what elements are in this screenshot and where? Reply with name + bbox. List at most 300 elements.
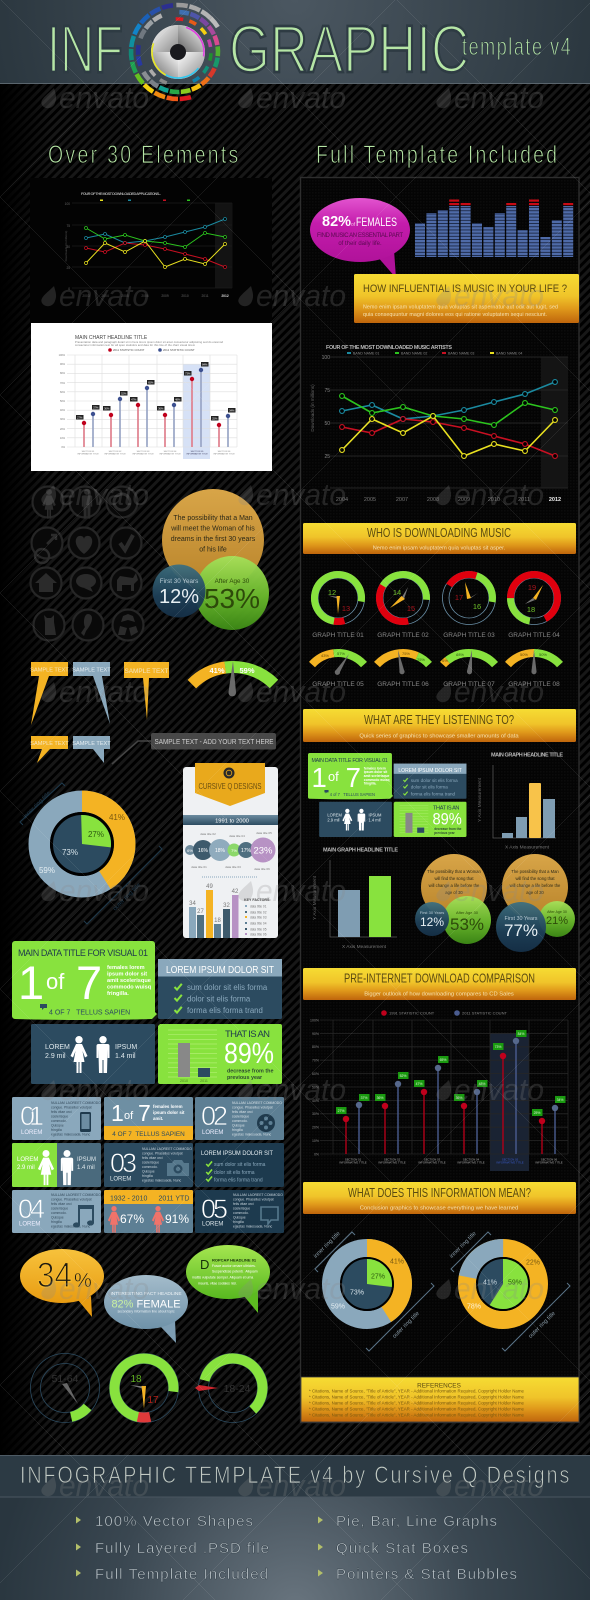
gauge: graph title 06 [354,639,452,737]
mini bar chart: 32 [223,903,230,909]
panel: white lollipop chart: SECTION 03 [137,451,150,453]
gauge: graph title 08: GRAPH TITLE 08 [508,681,560,688]
bubble row: data title 05 [256,831,272,835]
panel: white lollipop chart: 90% [60,363,66,366]
gauge: graph title 03: 17 [455,593,463,602]
tile 05: congue. Phasellus volutpat [233,1198,274,1202]
tile 05: NULLAM LAOREET COMMODO [233,1193,283,1197]
chart: downloads line chart: 2008 [427,497,439,503]
tile 05: felis vitae orci [233,1202,254,1206]
chart: downloads line chart: 100 [322,355,330,361]
gauge: 18 17 ring: 18 [130,1374,142,1385]
panel: small line chart: 2012 [221,294,229,298]
stat: population male female: LOREM [45,1044,70,1051]
key factors legend: data title 06 [250,932,267,936]
panel: white lollipop chart: SECTION 04 [164,451,177,453]
bubble row: data title 02 [200,832,216,836]
watermark: envato logos: envato [454,278,544,313]
tile 01: 01 [20,1101,44,1131]
stat: population male female: 1.4 mil [115,1053,136,1060]
chart: downloads line chart: 75 [324,388,330,394]
tile 1 of 7: of [124,1110,134,1122]
tile 1 of 7: amit. [153,1116,163,1121]
banner: how influential is music: Nemo enim ipsam voluptatem quia voluptas sit aspernatur aut odit aut fugit, sed [363,304,558,310]
gauge: graph title 08: 50% [520,652,528,657]
tile list: forma elis forma trand [214,1178,263,1184]
tile 01: NULLAM LAOREET COMMODO [51,1101,101,1105]
venn: possibility for a man: The possibility that a Man [511,869,559,874]
bubble row: 7% [231,848,237,853]
pointer: grey line callout: SAMPLE TEXT - ADD YOUR TEXT HERE [154,737,274,746]
heading: Over 30 Elements: Over 30 Elements [48,141,238,169]
feature list: left column: Fully Layered .PSD file [95,1540,269,1557]
tile 01 [12,1097,101,1140]
watermark: envato logos: envato [59,873,149,908]
gauge: graph title 07: GRAPH TITLE 07 [443,681,495,688]
tile 1 of 7: ipsum dolor sit [153,1110,185,1115]
pointer: orange narrow: SAMPLE TEXT [125,668,169,675]
legend: 2011 STATISTIC COUNT [113,348,145,352]
panel: small line chart: 2009 [161,294,169,298]
chart: statistic comparison lollipops: 65% [440,1058,446,1062]
gauge: graph title 07 [420,639,518,737]
panel: small line chart: 2005 [121,294,129,298]
tile male female [12,1143,101,1187]
panel: white lollipop chart: 36% [158,406,164,410]
banner: what does this information mean [303,1182,576,1214]
chart: statistic comparison lollipops: 52% [400,1074,406,1078]
stat: 89% decrease: decrease from the [227,1068,273,1074]
donut chart: 41 / 59 [313,1231,434,1351]
feature list: right column: Quick Stat Boxes [336,1540,468,1557]
title: INF GRAPHIC: INF [47,12,123,87]
tile 04: congue. Phasellus volutpat [51,1198,92,1202]
chart: downloads line chart: 2007 [396,497,408,503]
mini dashboard: quick stats: dolor sit elis forma [411,785,448,790]
chart: statistic comparison lollipops: 100% [310,1018,319,1022]
panel: white lollipop chart: 65% [148,380,154,384]
venn: possibility for a man: 21% [546,915,568,927]
stat: 1 of 7: commodo wuisq [107,984,152,990]
venn: possibility for a man [496,854,575,952]
venn: possibility of a man meeting the woman of his dreams: First 30 Years [160,578,198,585]
mini dashboard: quick stats: ipsum dolor sit [364,770,388,774]
donut chart: 41 / 59: 27% [371,1274,385,1280]
icon: colour wheel logo [130,4,219,100]
stat: 1 of 7 [12,941,157,1020]
venn: possibility for a man: will find the song that [515,876,555,881]
venn: possibility for a man: 77% [504,921,538,940]
venn: possibility for a woman: The possibility that a Woman [427,869,482,874]
chart: downloads line chart: FOUR OF THE MOST DOWNLOADED MUSIC ARTISTS [326,345,452,351]
gauge: 51-64 ring: 51-64 [52,1373,79,1385]
tile 02 [195,1097,284,1140]
tile 1 of 7 [104,1097,193,1140]
tile 01: fringilla [51,1128,62,1132]
donut chart: 41% [109,813,125,822]
speech bubble: 82% females: FEMALES [356,215,397,229]
mini dashboard: quick stats: 4 of 7 TELLUS SAPIEN [330,792,375,797]
tile 04: NULLAM LAOREET COMMODO [51,1193,101,1197]
tile 05: Quisque [233,1216,246,1220]
tile dates and percentages: 91% [165,1212,189,1226]
watermark: envato logos: envato [454,873,544,908]
watermark: envato logos: envato [454,1072,544,1107]
tile 01: egestas malesuada. Nunc [51,1132,91,1136]
mini dashboard: quick stats: previous year [434,831,456,835]
speech bubble: drop cap headline: Fusce auctor ornare ultricies. [212,1264,256,1268]
mini dashboard: quick stats: of [328,769,339,784]
donut chart: 22 / 78: 59% [508,1280,522,1286]
date band: 1991 to 2000 [215,818,249,824]
donut chart: 27% [88,830,104,839]
tile male female: 2.9 mil [17,1165,35,1171]
chart: statistic comparison lollipops: 36% [456,1096,462,1100]
chart: statistic comparison lollipops: 48% [479,1082,485,1086]
tile 03: scelerisque [142,1160,159,1164]
tile 03: commodo. [142,1165,158,1169]
banner: who is downloading music [303,523,576,554]
gauge: graph title 06: GRAPH TITLE 06 [377,681,429,688]
tile 05: egestas malesuada. Nunc [233,1224,273,1228]
chart: statistic comparison lollipops: INFORMATIVE TITLE [378,1160,406,1164]
banner: how influential is music: quia consequuntur magni dolores eos qui ratione voluptatem sequi nesciunt. [363,312,547,318]
panel: Cursive Q Designs card [183,763,278,938]
gauge: graph title 05: 43% [321,653,329,658]
panel: white lollipop chart: SECTION 02 [109,451,122,453]
panel: small line chart: 2004 [101,294,109,298]
tile 1 of 7: 4 OF 7 TELLUS SAPIEN [112,1131,185,1138]
bubble row: data title 04 [229,834,245,838]
mini dashboard: quick stats: commodo wuisq [364,778,390,782]
gauge: 41% / 59%: 41% [209,666,225,675]
speech bubble: drop cap headline: D [200,1257,209,1272]
panel: white lollipop chart: 27% [77,416,83,420]
panel: small line chart: 2003 [82,294,90,298]
tile 04 [12,1190,101,1233]
mini bar chart: 18 [214,918,221,924]
chart: statistic comparison lollipops: SECTION 06 [541,1158,558,1162]
chart: downloads line chart: 2011 [518,497,530,503]
panel: white lollipop chart: INFORMATIVE TITLE [132,452,154,456]
gauge: graph title 01 [310,570,366,639]
footer title: INFOGRAPHIC TEMPLATE v4 by Cursive Q Designs [20,1461,569,1488]
chart: statistic comparison lollipops: SECTION 04 [463,1158,480,1162]
banner: pre-internet download comparison: Bigger outlook of how downloading compares to CD Sales [364,992,514,998]
venn: possibility of a man meeting the woman of his dreams: dreams in the first 30 years [171,536,256,543]
donut chart [20,783,162,924]
gauge: graph title 07: 6% [442,658,448,663]
chart: statistic comparison lollipops: INFORMATIVE TITLE [418,1160,446,1164]
venn: possibility for a woman: 12% [420,915,444,929]
gauge: graph title 02: 15 [407,604,415,613]
gauge: graph title 01: GRAPH TITLE 01 [312,632,364,639]
stat: 1 of 7: amit scelerisque [107,978,151,984]
key factors legend [244,898,271,936]
bubble row: data title 06 [254,867,270,871]
donut chart: 22 / 78 [449,1231,570,1351]
legend: 1991 STATISTIC COUNT [389,1010,435,1016]
panel: small line chart: 100 [65,202,70,206]
speech bubble: 82% females: of their daily life. [338,241,382,247]
gauge: 41% / 59%: 59% [239,666,255,675]
gauge: graph title 05: 57% [337,651,345,656]
speech bubble: 82% females: of [351,222,356,228]
panel: white lollipop chart: 10% [60,437,66,440]
tile 02: NULLAM LAOREET COMMODO [232,1101,282,1105]
panel: white lollipop chart: 36% [104,406,110,410]
bubble row [185,831,276,871]
bar chart: main graph headline left: X Axis Measurement [342,944,387,950]
list: lorem ipsum [158,959,282,1019]
panel: references [301,1377,579,1422]
panel: white lollipop chart: 80% [60,372,66,375]
stat: 1 of 7: females lorem [107,965,145,971]
venn: possibility for a woman: will find the song that [434,876,474,881]
banner: what are they listening to [303,709,576,742]
chart: statistic comparison lollipops: 80% [312,1045,319,1049]
mini dashboard: quick stats: MAIN DATA TITLE FOR VISUAL 01 [312,758,388,764]
mini dashboard: quick stats: females lorem [364,766,386,770]
venn: possibility of a man meeting the woman of his dreams [152,489,269,630]
chart: statistic comparison lollipops: 40% [312,1099,319,1103]
legend: 2011 STATISTIC COUNT [462,1010,507,1016]
stat: 1 of 7: 7 [76,956,102,1009]
tile dates and percentages: 1932 - 2010 [110,1196,147,1202]
tile 01: congue. Phasellus volutpat [51,1106,92,1110]
speech bubble: 82% females: 82% [322,214,351,230]
mini bar chart: 27 [197,909,204,915]
chart: statistic comparison lollipops: 25% [534,1111,540,1115]
tile 03 [104,1143,193,1187]
stat: 1 of 7: fringilla. [107,991,129,997]
venn: possibility for a woman: 53% [450,915,484,934]
speech bubble: 82% female: secondary information line about topic [117,1310,175,1314]
tile 05: fringilla [233,1220,244,1224]
pointer: orange narrow [124,662,169,720]
tile 04: fringilla [51,1220,62,1224]
gauge: graph title 05: GRAPH TITLE 05 [312,681,364,688]
tile 02: commodo. [232,1119,248,1123]
bubble row: 17% [241,848,252,854]
panel: small line chart: 25 [66,266,70,270]
chart: statistic comparison lollipops: SECTION 03 [424,1158,441,1162]
tile 02: congue. Phasellus volutpat [232,1106,273,1110]
bar chart: main graph headline right: X Axis Measurement [505,844,550,850]
bracket: inner ring title: inner ring title [22,790,53,820]
key factors legend: data title 01 [250,904,267,908]
gauge: 18 17 ring [109,1353,179,1423]
venn: possibility for a woman: First 30 Years [420,910,444,915]
tile 04: egestas malesuada. Nunc [51,1224,91,1228]
ribbon header: CURSIVE Q DESIGNS [198,782,262,791]
mini dashboard: quick stats: decrease from the [434,827,462,831]
chart: statistic comparison lollipops: 37% [361,1096,367,1100]
chart: statistic comparison lollipops: INFORMATIVE TITLE [535,1160,563,1164]
panel: white lollipop chart: SECTION 06 [218,451,231,453]
stat: 1 of 7: ipsum dolor sit [107,972,147,978]
gauge: graph title 02: 14 [393,588,401,597]
panel: references: * Citations, Name of Source, "Title of Article", YEAR - Additional Information Required, Copyright Holder Name [309,1388,525,1394]
mini dashboard: quick stats: 1 [312,762,327,793]
tile list [195,1143,284,1187]
watermark: envato logos: envato [59,278,149,313]
chart: statistic comparison lollipops: 10% [312,1139,319,1143]
tile 03: egestas malesuada. Nunc [142,1178,182,1182]
panel: white lollipop chart: Presentation data and paragraph detail sit in here lorem ipsum dolor sit amet consectetur adipiscing sed do eiusmod [75,340,224,344]
feature list: left column: Full Template Included [95,1566,268,1583]
tile 02: egestas malesuada. Nunc [232,1132,272,1136]
chart: statistic comparison lollipops: 73% [495,1045,501,1049]
panel: small line chart: 50 [66,245,70,249]
mini dashboard: quick stats [308,753,466,837]
chart: statistic comparison lollipops: SECTION 02 [384,1158,401,1162]
mini bar chart: 34 [189,901,196,907]
chart: downloads line chart: 50 [324,421,330,427]
donut chart: 59% [39,866,55,875]
watermark: envato logos: envato [256,674,346,709]
ribbon header [195,763,265,806]
watermark: envato logos: envato [59,674,149,709]
bubble row: 18% [215,848,226,854]
gauge: graph title 01: 12 [328,588,336,597]
donut chart: 73% [62,848,78,857]
panel: white lollipop chart: SECTION 05 [191,451,204,453]
mini dashboard: quick stats: amit scelerisque [364,774,390,778]
bar chart: main graph headline left: Y Axis Measurement [312,875,318,920]
pointers: sample text callouts [30,662,276,764]
tile male female: LOREM [17,1157,38,1163]
gauge: graph title 02: GRAPH TITLE 02 [377,632,429,639]
stat: population male female: 2.9 mil [45,1053,66,1060]
chart: statistic comparison lollipops: INFORMATIVE TITLE [339,1160,367,1164]
panel: references: * Citations, Name of Source, "Title of Article", YEAR - Additional Information Required, Copyright Holder Name [309,1400,525,1406]
banner: what does this information mean: Conclusion graphics to showcase everything we have learned [360,1206,518,1212]
chart: statistic comparison lollipops: SECTION 05 [502,1158,519,1162]
gauge: 41% / 59% [151,643,315,807]
chart: downloads line chart: 25 [324,454,330,460]
mini dashboard: quick stats: LOREM [327,812,343,817]
stat: population male female [31,1024,155,1084]
mini dashboard: quick stats: 7 [346,762,361,793]
bracket: outer ring title [84,846,162,924]
venn: possibility of a man meeting the woman of his dreams: 12% [159,586,199,608]
watermark: envato logos: envato [256,80,346,115]
tile 1 of 7: females lorem [153,1104,183,1109]
venn: possibility of a man meeting the woman of his dreams: will meet the Woman of his [170,526,255,532]
bar chart: main graph headline right: MAIN GRAPH HEADLINE TITLE [491,752,563,758]
watermark: envato logos: envato [256,1468,346,1503]
tile 02: Quisque [232,1124,245,1128]
pointer: orange long: SAMPLE TEXT [30,668,69,674]
panel: white lollipop chart: 0% [61,446,66,449]
chart: downloads line chart: 2009 [458,497,470,503]
tile list: LOREM IPSUM DOLOR SIT [201,1150,273,1157]
watermark: envato logos: envato [454,80,544,115]
tile 03: LOREM [110,1176,131,1182]
gauge: graph title 04: 19 [528,583,536,592]
stat: 89% decrease: 2010 [180,1079,188,1083]
speech bubble: 82% females [310,198,410,278]
panel: white lollipop chart: 84% [202,362,208,366]
venn: possibility of a man meeting the woman of his dreams: The possibility that a Man [173,515,253,522]
legend [108,348,195,352]
chart: statistic comparison lollipops [310,1010,568,1171]
gauge: graph title 04: GRAPH TITLE 04 [508,632,560,639]
bracket: outer ring title: outer ring title [112,882,143,912]
tile 03: 03 [110,1148,137,1178]
venn: possibility for a man: After Age 30 [547,910,567,914]
gauge: 18 17 ring: 17 [147,1395,159,1406]
tile 05: commodo. [233,1211,249,1215]
stat: 89% decrease: THAT IS AN [225,1029,270,1040]
tile 02: felis vitae orci [232,1110,253,1114]
watermark: envato logos: envato [454,477,544,512]
chart: statistic comparison lollipops: 30% [312,1112,319,1116]
list: lorem ipsum: dolor sit elis forma [187,994,251,1004]
speech bubble: 82% female: 82% FEMALE [111,1298,181,1310]
stat: 89% decrease: 89% [224,1038,274,1070]
panel: white lollipop chart: 73% [185,372,191,376]
list: lorem ipsum: LOREM IPSUM DOLOR SIT [166,965,274,976]
speech bubble: drop cap headline: mattis vulputate semper. Aliquam et urna [192,1276,253,1280]
tile 04: scelerisque [51,1206,68,1210]
watermark: envato logos: envato [59,1271,149,1306]
bar chart: main graph headline left [312,848,398,950]
panel: small line chart: FOUR OF THE MOST DOWNLOADED APPLICATIONS... [81,191,161,196]
banner: who is downloading music: Nemo enim ipsam voluptatem quia voluptas sit asper. [373,546,506,552]
gauge: graph title 07: 88% [456,652,464,657]
chart: downloads line chart [310,345,568,503]
chart: statistic comparison lollipops: 34% [557,1098,563,1102]
venn: possibility of a man meeting the woman of his dreams: 53% [204,583,260,614]
bracket: outer ring title: outer ring title [528,1311,557,1340]
gauge: graph title 05 [289,639,387,737]
venn: possibility for a woman: age of 30 [445,890,463,895]
donut chart: 41 / 59: 59% [331,1304,345,1310]
venn: possibility for a man: will change a life before the [510,883,561,888]
panel: white lollipop chart: INFORMATIVE TITLE [186,452,208,456]
panel: references: * Citations, Name of Source, "Title of Article", YEAR - Additional Information Required, Copyright Holder Name [309,1412,525,1418]
tile list: dolor sit elis forma [214,1170,255,1176]
icon set: dark round buttons [30,486,144,640]
panel: white lollipop chart: 37% [93,406,99,410]
pointer: blue short [72,736,111,763]
watermark: envato logos: envato [256,477,346,512]
tile list: sum dolor sit elis forma [214,1162,266,1168]
mini dashboard: quick stats: 89% [432,810,462,829]
watermark: envato logos: envato [59,1468,149,1503]
tile 03: congue. Phasellus volutpat [142,1152,183,1156]
gauge: graph title 04: 18 [527,605,535,614]
watermark: envato logos [41,80,544,1503]
chart: statistic comparison lollipops: 84% [518,1032,524,1036]
banner: pre-internet download comparison [303,968,576,1000]
tile 04: commodo. [51,1211,67,1215]
speech bubble: drop cap headline [186,1245,270,1313]
venn: possibility for a woman: After Age 30 [456,910,479,915]
chart: downloads line chart: BAND NAME 03 [448,352,474,356]
speech bubble: 34%: 34 [37,1256,72,1295]
panel: white lollipop chart: 60% [60,391,66,394]
chart: statistic comparison lollipops: INFORMATIVE TITLE [457,1160,485,1164]
chart: statistic comparison lollipops: 20% [312,1126,319,1130]
bubble row: data title 01 [191,865,207,869]
key factors legend: data title 02 [250,910,267,914]
mini dashboard: quick stats: 2.9 mil [327,818,340,823]
banner: what are they listening to: WHAT ARE THEY LISTENING TO? [364,712,514,727]
tile 05: LOREM [202,1222,223,1228]
